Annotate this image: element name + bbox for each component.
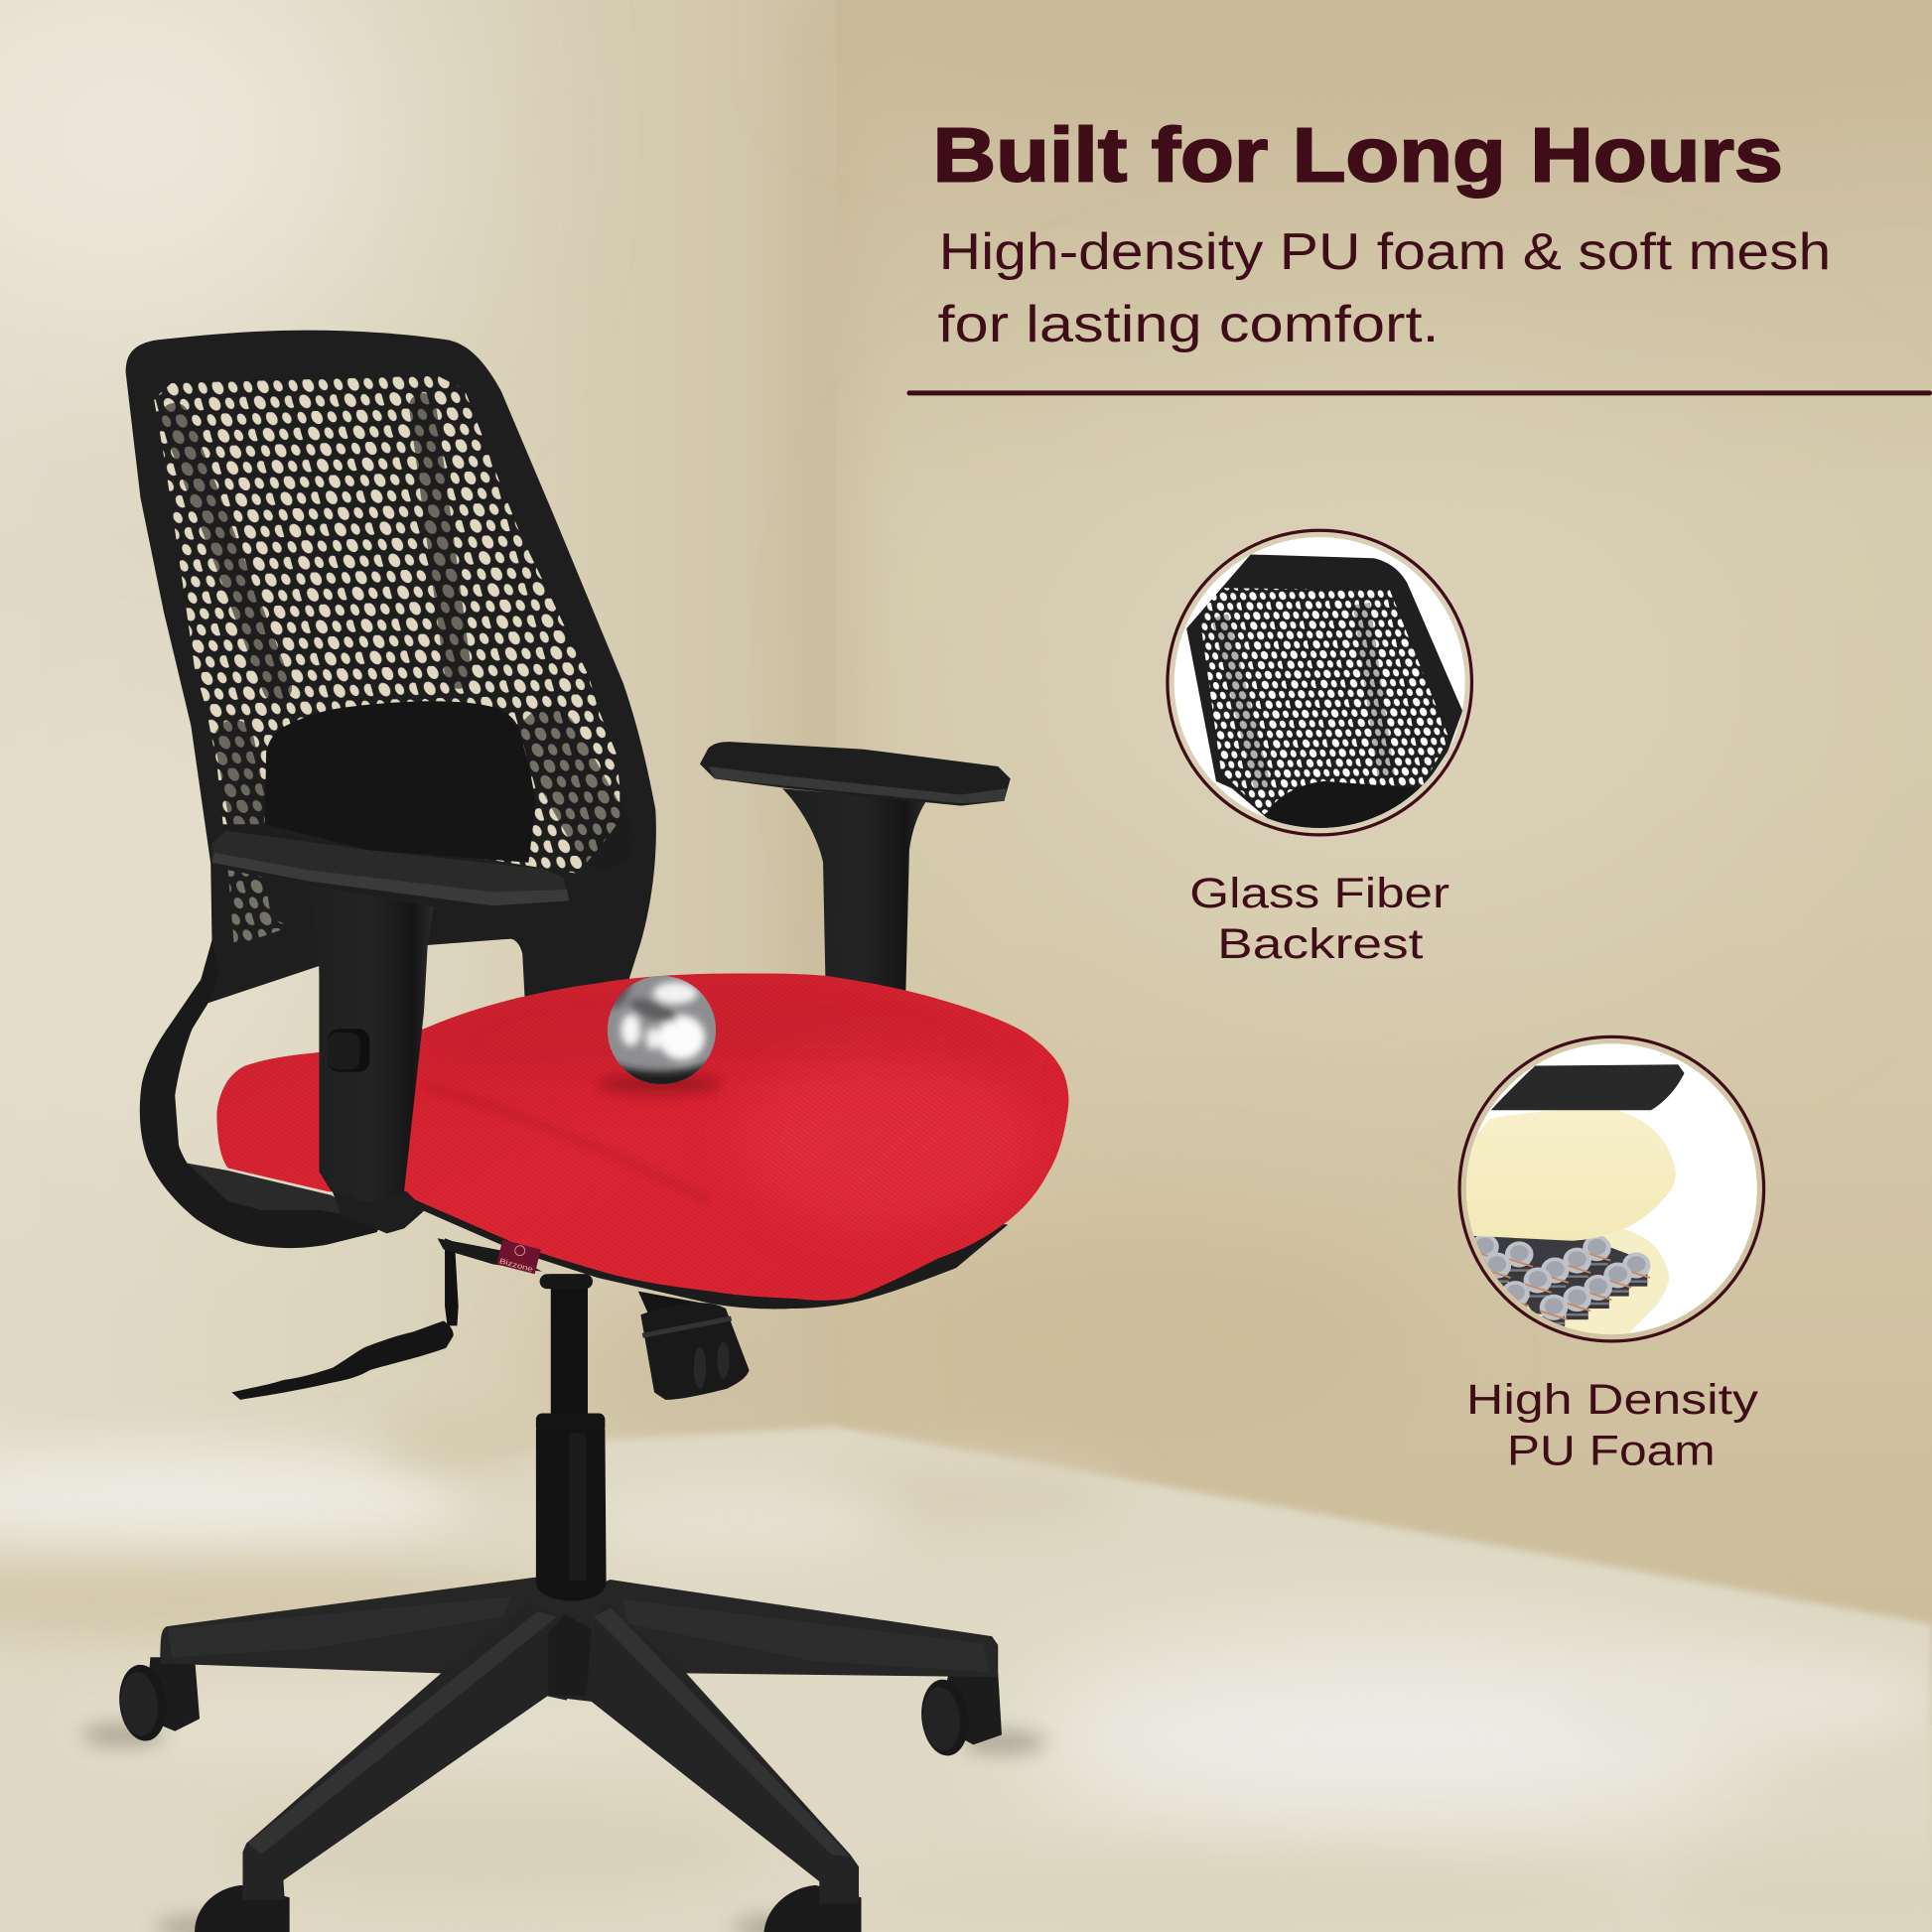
mesh perforation	[154, 376, 620, 874]
front armrest	[211, 830, 569, 1233]
black mesh pad	[1491, 1064, 1685, 1110]
circle ring	[1459, 1036, 1764, 1341]
chair base with five legs	[115, 1578, 1002, 1932]
rear armrest	[700, 742, 1011, 998]
heading: Built for Long Hours	[932, 112, 1783, 198]
right wall	[835, 0, 1932, 1725]
seat fabric	[216, 973, 1068, 1301]
ball shadow	[598, 1074, 721, 1094]
brand tag: Bizzone	[498, 1256, 534, 1274]
ball sphere	[608, 976, 716, 1084]
rear arm pad	[700, 742, 1011, 806]
right rear caster	[917, 1673, 1002, 1758]
callout: high density PU foam	[1442, 1036, 1764, 1474]
front arm post	[295, 883, 434, 1202]
lower mesh patch	[228, 870, 291, 946]
left wall	[0, 0, 835, 1601]
leg bevels	[168, 1596, 990, 1857]
label: PU Foam	[1507, 1428, 1716, 1474]
loop arm	[140, 940, 388, 1248]
rear arm post	[782, 788, 926, 998]
caster shadows	[81, 1724, 1046, 1932]
callout: glass fiber backrest	[1168, 530, 1471, 967]
seat base strip	[188, 1164, 369, 1220]
front arm pad	[211, 830, 569, 905]
wall light and shade	[0, 0, 1932, 1453]
label	[1466, 1376, 1759, 1474]
subheading	[937, 223, 1831, 353]
circle image: foam layers	[1442, 1043, 1757, 1337]
brand tag	[496, 1240, 541, 1274]
subheading: for lasting comfort.	[937, 296, 1440, 353]
right front caster	[763, 1885, 862, 1932]
right leg	[561, 1580, 998, 1701]
seat bracket	[332, 1189, 425, 1233]
steel ball	[598, 976, 721, 1094]
backrest shell	[126, 331, 656, 1003]
label: Glass Fiber	[1189, 870, 1449, 916]
seat shading	[209, 967, 1072, 1312]
tilt knob	[638, 1292, 750, 1400]
floor light and shade	[0, 1411, 1932, 1932]
left front caster	[195, 1885, 290, 1932]
left leg	[160, 1578, 579, 1701]
rear arm button	[834, 911, 862, 944]
front arm button	[328, 1029, 369, 1072]
divider rule	[906, 390, 1932, 395]
front right leg	[561, 1601, 859, 1903]
mesh rib shadows	[175, 407, 604, 838]
spring layer	[1470, 1234, 1650, 1328]
foam lower layer	[1442, 1228, 1670, 1337]
floor	[0, 1427, 1932, 1932]
chair illustration	[115, 331, 1072, 1932]
label: High Density	[1466, 1376, 1759, 1423]
seat underside rim	[369, 1182, 1008, 1309]
circle ring	[1168, 530, 1471, 835]
label: Backrest	[1217, 920, 1424, 967]
subheading: High-density PU foam & soft mesh	[939, 223, 1831, 281]
backrest shell and loop arm	[126, 331, 656, 1248]
height lever	[231, 1238, 459, 1400]
ball reflections	[604, 980, 721, 1090]
mechanism bar	[438, 1238, 542, 1272]
lumbar pad	[265, 701, 536, 863]
circle image: backrest mesh	[1174, 537, 1465, 838]
front left leg	[242, 1601, 579, 1900]
red seat cushion	[209, 967, 1072, 1312]
central hub	[548, 1614, 592, 1696]
foam top layer	[1453, 1109, 1676, 1241]
label	[1189, 870, 1449, 967]
left rear caster	[115, 1657, 200, 1743]
gas lift column	[536, 1274, 607, 1600]
